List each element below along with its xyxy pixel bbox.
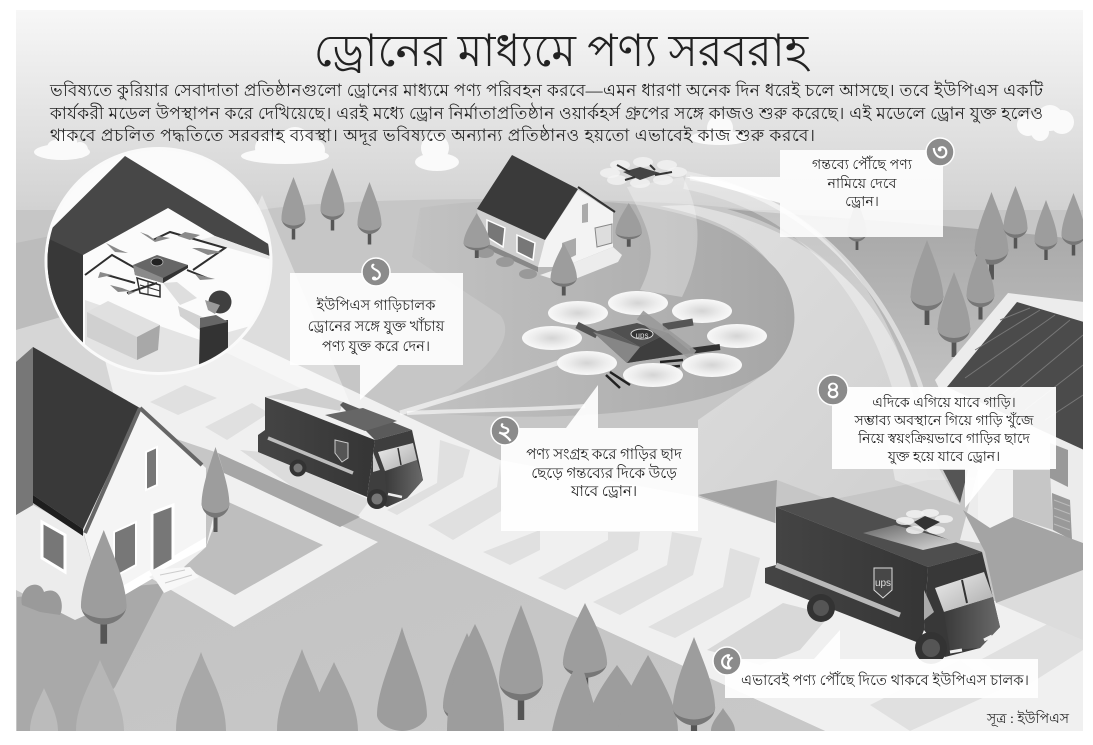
- callout 1: ইউপিএস গাড়িচালক: [315, 296, 436, 314]
- drone on large van: [896, 509, 953, 534]
- number 1: [362, 258, 390, 286]
- callout 3: গন্তব্যে পৌঁছে পণ্য: [812, 156, 913, 173]
- intro text: কার্যকরী মডেল উপস্থাপন করে দেখিয়েছে। এরই মধ্যে ড্রোন নির্মাতাপ্রতিষ্ঠান ওয়ার্কহর্স গ্রুপের সঙ্গে কাজও শুরু করেছে। এই মডেলে ড্রোন যুক্ত হলেও: [49, 103, 1043, 123]
- far house: [464, 155, 642, 296]
- curved road band: [660, 205, 928, 500]
- front walkway and garden: [149, 453, 378, 627]
- callout 1: [290, 258, 463, 400]
- big drone: [522, 291, 767, 388]
- callout 5: এভাবেই পণ্য পৌঁছে দিতে থাকবে ইউপিএস চালক।: [741, 671, 1029, 689]
- small drone in flight: [600, 157, 687, 188]
- parcel box: [87, 301, 160, 360]
- UPS emblem: [631, 329, 653, 340]
- inset circle: loading the drone: [40, 147, 280, 375]
- main road: [100, 333, 1083, 731]
- bottom trees: [30, 603, 735, 743]
- callout 2: পণ্য সংগ্রহ করে গাড়ির ছাদ: [526, 445, 683, 463]
- lawn around drone: [467, 200, 794, 416]
- callout 4: সম্ভাব্য অবস্থানে গিয়ে গাড়ি খুঁজে: [853, 412, 1034, 429]
- callout 1: পণ্য যুক্ত করে দেন।: [322, 339, 430, 355]
- title: ড্রোনের মাধ্যমে পণ্য সরবরাহ: [314, 26, 811, 76]
- number 2: ২: [497, 419, 513, 445]
- callout 2: [491, 385, 698, 531]
- callout 3: [685, 138, 954, 237]
- callout 1: ড্রোনের সঙ্গে যুক্ত খাঁচায়: [308, 317, 446, 335]
- callout 4: নিয়ে স্বয়ংক্রিয়ভাবে গাড়ির ছাদে: [857, 430, 1031, 447]
- number 5: ৫: [719, 649, 735, 675]
- number 4: [818, 375, 848, 405]
- UPS logo: [874, 568, 892, 598]
- small UPS van: [258, 388, 423, 509]
- callout 4: এদিকে এগিয়ে যাবে গাড়ি।: [872, 394, 1016, 411]
- parcel tray: [163, 282, 197, 305]
- delivery person: [178, 290, 232, 367]
- callout 4: [818, 375, 1056, 508]
- drone frame: [85, 232, 225, 297]
- source: সূত্র : ইউপিএস: [986, 710, 1070, 727]
- flight paths: [200, 177, 960, 505]
- clouds: [34, 105, 1074, 171]
- callout 2: যাবে ড্রোন।: [570, 484, 637, 500]
- garden trees: [81, 447, 229, 644]
- UPS emblem: ups: [636, 331, 648, 340]
- number 2: [491, 417, 519, 445]
- UPS logo: ups: [875, 578, 891, 589]
- intro text: ভবিষ্যতে কুরিয়ার সেবাদাতা প্রতিষ্ঠানগুলো ড্রোনের মাধ্যমে পণ্য পরিবহন করবে—এমন ধারণা অনেক দিন ধরেই চলে আসছে। তবে ইউপিএস একটি: [49, 80, 1044, 100]
- callout 5: [713, 630, 1038, 698]
- callout 2: ছেড়ে গন্তব্যের দিকে উড়ে: [531, 464, 677, 482]
- number 1: ১: [368, 260, 384, 286]
- large UPS van: [765, 497, 1000, 664]
- number 3: ৩: [932, 140, 948, 166]
- bottom-left lawn ground: [17, 518, 824, 731]
- intro text: থাকবে প্রচলিত পদ্ধতিতে সরবরাহ ব্যবস্থা। অদূর ভবিষ্যতে অন্যান্য প্রতিষ্ঠানও হয়তো এভাবেই কাজ শুরু করবে।: [50, 125, 815, 146]
- main house bottom-left: [16, 347, 206, 620]
- callout 3: ড্রোন।: [845, 194, 879, 210]
- right house: [935, 293, 1084, 603]
- number 3: [926, 138, 954, 166]
- number 5: [713, 647, 741, 675]
- callout 3: নামিয়ে দেবে: [827, 175, 897, 192]
- far hills: [16, 199, 1083, 480]
- callout 4: যুক্ত হয়ে যাবে ড্রোন।: [887, 450, 1000, 465]
- number 4: ৪: [825, 378, 841, 404]
- trees: upper row: [282, 168, 1086, 357]
